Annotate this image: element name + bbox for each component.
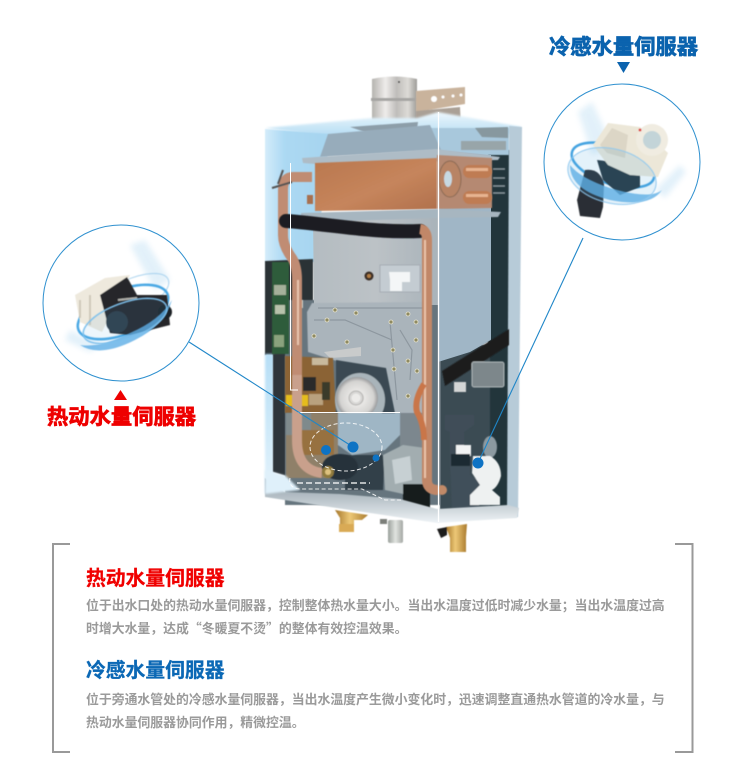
description: hot servo (86, 598, 665, 637)
description: cold servo (86, 692, 665, 730)
heat exchanger hood (320, 125, 441, 157)
heading: hot servo: 热动水量伺服器 (86, 568, 225, 590)
brass connector right (437, 524, 467, 552)
description: cold servo: 热动水量伺服器协同作用，精微控温。 (86, 715, 305, 730)
marker dots (321, 442, 484, 468)
exchanger flange (302, 149, 500, 164)
control board (272, 262, 303, 354)
lower left blue edge (265, 354, 274, 494)
hot servo pointer triangle (114, 390, 127, 400)
cold servo pointer triangle (617, 62, 630, 73)
callout: cold water servo (544, 34, 700, 240)
igniter fitting (364, 265, 420, 292)
upper body blue grey (438, 150, 491, 362)
leader line: hot servo (189, 342, 353, 447)
flue pipe (371, 76, 418, 124)
panel bracket left (53, 544, 70, 752)
right lower compartment (442, 329, 509, 510)
description panel (53, 544, 692, 752)
heading: cold servo: 冷感水量伺服器 (86, 660, 225, 682)
water heater cutaway illustration (265, 76, 522, 552)
copper exchanger (315, 158, 437, 211)
gas valve (383, 445, 425, 497)
hot servo valve image (65, 240, 176, 353)
brown circuit board (285, 356, 336, 413)
cold servo title: 冷感水量伺服器 (549, 34, 699, 59)
burner bolts (312, 308, 419, 398)
description: hot servo: 位于出水口处的热动水量伺服器，控制整体热水量大小。当出水温度过低时减少水量；当出水温度过高 (86, 598, 665, 614)
left blue panel (265, 129, 330, 262)
dashed ghost outline (290, 423, 402, 500)
black insulated pipe (286, 221, 420, 231)
callout: hot water servo (43, 225, 199, 429)
interior backing (285, 300, 440, 505)
glass casing top (265, 112, 522, 136)
right copper pipe (416, 229, 447, 495)
right dark interior (488, 150, 510, 508)
glass highlight lines (290, 112, 438, 522)
black hot water servo valve (322, 454, 358, 480)
lower flange (301, 209, 501, 222)
panel bracket right (675, 544, 692, 752)
cold servo valve image (562, 102, 686, 218)
left dark panel (265, 259, 313, 356)
wall bracket (416, 87, 465, 128)
description: cold servo: 位于旁通水管处的冷感水量伺服器，当出水温度产生微小变化时，迅速调整直通热水管道的冷水量，与 (86, 692, 665, 707)
hot servo circle (43, 225, 199, 381)
upper body grey (313, 212, 438, 305)
upper right blue panel (430, 128, 509, 155)
leader line: cold servo (478, 238, 583, 463)
brass connector left (335, 510, 368, 532)
cold servo circle (544, 84, 700, 240)
burner plate (307, 302, 428, 414)
right side strip (507, 126, 522, 517)
volute (338, 413, 403, 455)
lower glass zone (286, 413, 430, 510)
silver connector (380, 519, 403, 543)
description: hot servo: 时增大水量，达成“冬暖夏不烫”的整体有效控温效果。 (86, 618, 407, 637)
casing bottom plate (265, 478, 519, 523)
fan blower (335, 360, 395, 427)
exchanger coils (439, 161, 505, 204)
left copper pipe (272, 170, 322, 473)
hot servo title: 热动水量伺服器 (47, 405, 197, 429)
